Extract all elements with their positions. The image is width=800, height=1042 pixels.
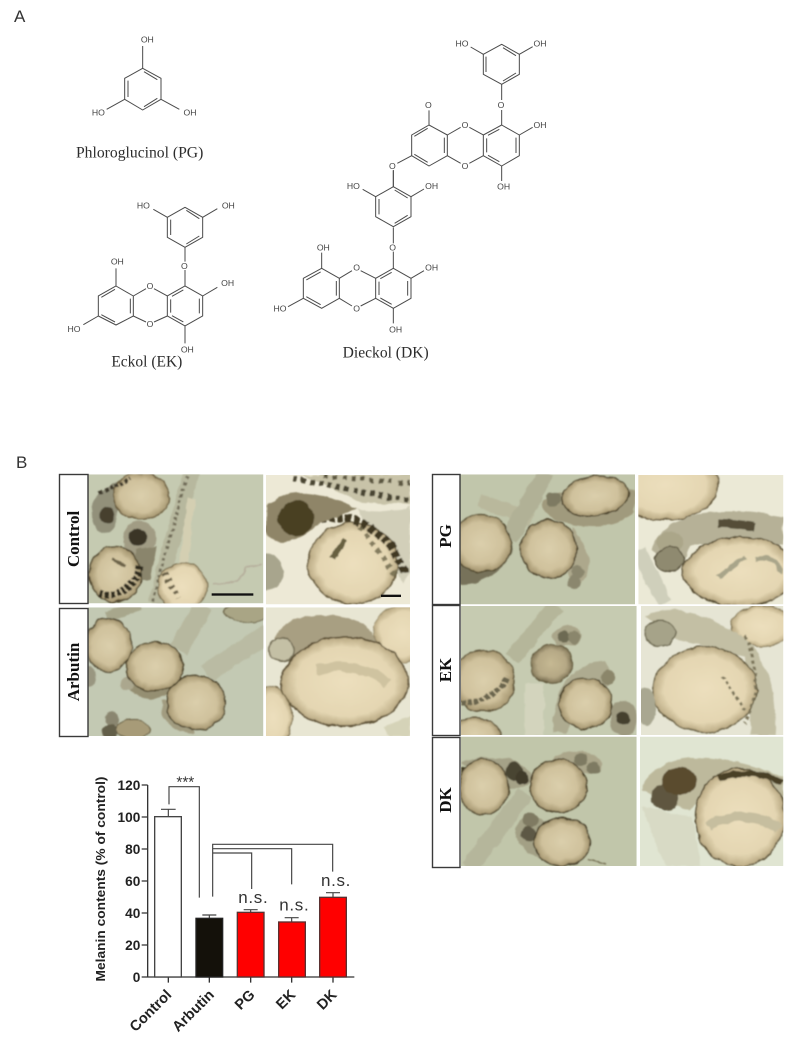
scale bar [212, 593, 253, 596]
row label: EK: EK [436, 657, 455, 682]
significance brackets: n.s. [279, 895, 309, 914]
caption: eckol: Eckol (EK) [111, 354, 182, 371]
structure: eckol: O [147, 281, 154, 291]
micrograph: control wide [88, 472, 263, 611]
row label: PG [432, 474, 460, 604]
structure: dieckol upper part [389, 39, 546, 191]
structure: dieckol lower part: HO [347, 181, 360, 191]
structure: dieckol lower part: OH [317, 242, 330, 252]
structure: eckol: OH [222, 200, 235, 210]
structure: dieckol upper part: O [462, 161, 469, 171]
panel A: chemical structures left [68, 35, 438, 371]
structure: dieckol upper part: OH [534, 39, 546, 49]
micrograph: control close-up [250, 475, 410, 604]
significance brackets: n.s. [238, 888, 268, 907]
micrograph: DK close-up [640, 737, 785, 866]
bar: PG [237, 910, 264, 977]
caption: dieckol: Dieckol (DK) [343, 344, 429, 361]
y tick labels: 60 [125, 874, 141, 889]
row label: Control [60, 474, 88, 604]
x tick labels: PG [232, 987, 258, 1013]
structure: eckol: OH [111, 256, 124, 266]
bar: Control [155, 809, 181, 977]
y tick labels [118, 778, 141, 985]
x tick labels: Arbutin [170, 987, 218, 1035]
structure: dieckol upper part: HO [456, 39, 469, 49]
bar: Arbutin [196, 915, 223, 977]
structure: dieckol upper part: OH [497, 181, 510, 191]
structure: phloroglucinol [92, 35, 196, 118]
micrograph: EK close-up [637, 605, 792, 735]
y tick labels: 100 [118, 810, 141, 825]
structure: dieckol lower part [274, 170, 438, 334]
row label: Control: Control [64, 511, 83, 567]
bar: EK [279, 918, 305, 977]
micrograph: EK wide [461, 606, 637, 735]
structure: eckol: O [147, 319, 154, 329]
structure: dieckol lower part: O [353, 263, 360, 273]
structure: dieckol lower part: OH [425, 181, 438, 191]
structure: eckol: HO [68, 324, 81, 334]
panel label: A: A [14, 7, 26, 26]
row label: Arbutin: Arbutin [64, 642, 83, 701]
structure: dieckol lower part: O [353, 303, 360, 313]
x tick labels: EK [273, 987, 299, 1013]
micrograph: arbutin close-up [266, 607, 410, 736]
structure: dieckol upper part: O [425, 100, 432, 110]
micrograph: PG wide [452, 472, 635, 604]
panel label: B: B [16, 453, 27, 472]
row label: DK: DK [436, 786, 455, 813]
scale bar [381, 595, 401, 597]
significance brackets: n.s. [321, 871, 351, 890]
structure: eckol: HO [137, 200, 150, 210]
row label: PG: PG [436, 524, 455, 548]
y tick labels: 0 [133, 970, 141, 985]
structure: phloroglucinol: OH [141, 35, 154, 45]
structure: dieckol lower part: O [389, 242, 396, 252]
structure: dieckol lower part: OH [389, 324, 402, 334]
structure: dieckol upper part: O [498, 100, 505, 110]
panel B: left micrographs [88, 474, 410, 736]
x tick labels [127, 987, 341, 1035]
y axis title: Melanin contents (% of control) [93, 776, 108, 981]
y tick labels: 20 [125, 938, 141, 953]
structure: dieckol upper part: O [462, 120, 469, 130]
row label: EK [432, 606, 460, 736]
panel B: right micrographs [460, 474, 784, 866]
structure: phloroglucinol: HO [92, 108, 105, 118]
caption: phloroglucinol: Phloroglucinol (PG) [76, 145, 203, 162]
structure: dieckol lower part: HO [274, 304, 287, 314]
structure: dieckol upper part: OH [534, 120, 546, 130]
micrograph: DK wide [459, 737, 637, 868]
significance brackets: *** [176, 775, 194, 792]
bar chart: melanin contents [93, 775, 354, 1035]
x tick labels: DK [314, 987, 341, 1013]
structure: eckol: OH [181, 345, 194, 355]
structure: eckol: OH [221, 278, 234, 288]
significance brackets [169, 775, 351, 914]
structure: dieckol lower part: OH [425, 263, 438, 273]
row label: DK [432, 738, 460, 868]
micrograph: PG close-up [638, 475, 784, 604]
axes and ticks [142, 785, 354, 983]
structure: eckol: O [181, 261, 188, 271]
y tick labels: 120 [118, 778, 141, 793]
structure: eckol [68, 200, 235, 355]
y tick labels: 40 [125, 906, 141, 921]
micrograph: arbutin wide [88, 607, 264, 736]
y tick labels: 80 [125, 842, 141, 857]
structure: phloroglucinol: OH [184, 108, 196, 118]
row label: Arbutin [60, 608, 88, 736]
structure: dieckol upper part: O [389, 161, 396, 171]
x tick labels: Control [127, 987, 175, 1035]
bar: DK [320, 893, 346, 977]
